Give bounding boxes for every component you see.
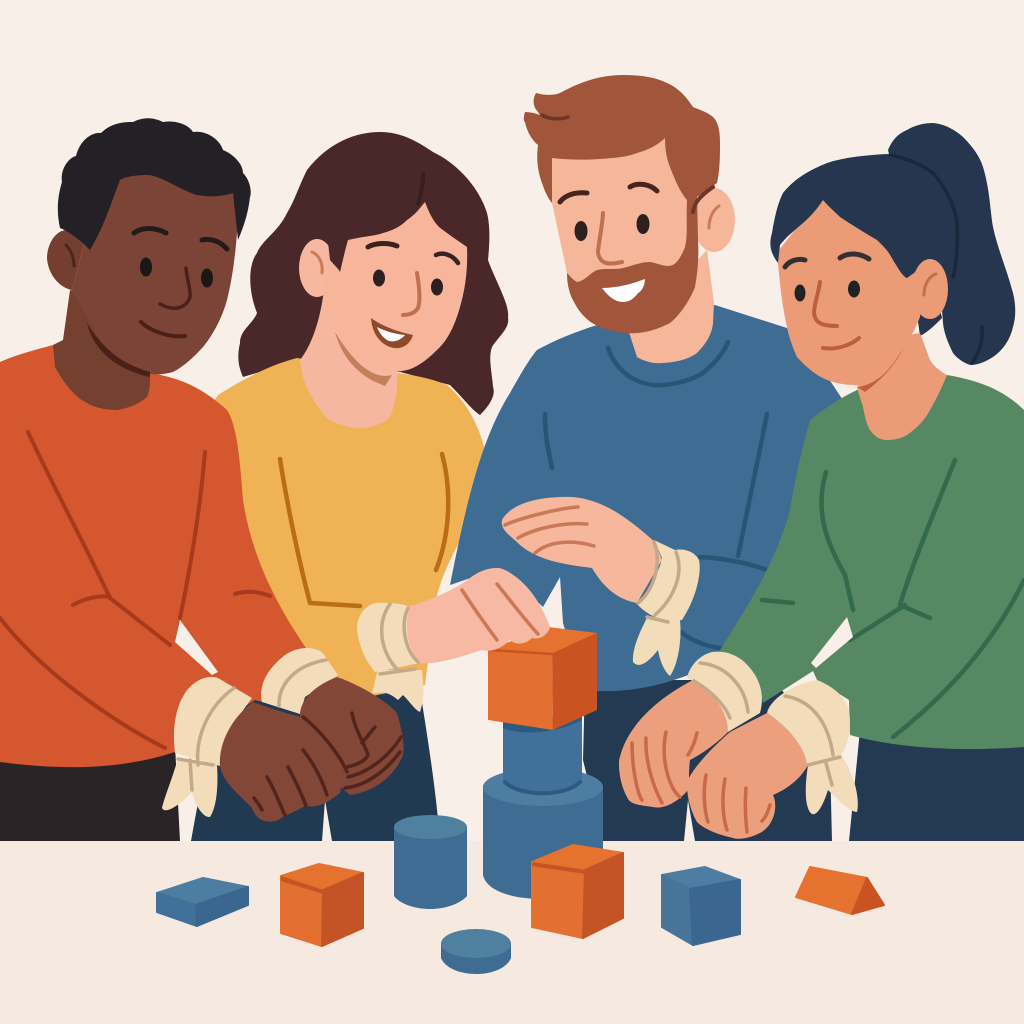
hair: [770, 154, 957, 305]
cuff tail: [806, 757, 858, 814]
ear: [912, 259, 948, 319]
smile: [371, 318, 413, 348]
sweater: [720, 375, 1024, 749]
face: [545, 125, 695, 325]
cuff: [687, 652, 762, 732]
hand: [502, 497, 662, 603]
hand: [300, 677, 404, 795]
pants: [849, 730, 1024, 841]
hand: [687, 713, 808, 839]
face: [323, 190, 467, 371]
person 3: man in blue sweater: [450, 75, 846, 841]
cuff: [767, 680, 850, 765]
table surface: [0, 841, 1024, 1024]
ear inner: [66, 245, 74, 266]
neck: [300, 297, 400, 428]
ponytail tail line: [972, 327, 982, 363]
neck shadow: [335, 332, 392, 386]
pants: [0, 745, 180, 841]
person 1: man in orange sweater: [0, 118, 306, 841]
face: [775, 195, 925, 385]
sweater folds: [762, 460, 1024, 737]
sweater folds: [280, 454, 448, 606]
person 2: woman in yellow sweater: [190, 132, 508, 841]
face: [72, 160, 238, 374]
finger lines: [462, 584, 538, 640]
beard: [567, 195, 698, 333]
gap: [811, 617, 853, 668]
ponytail band line: [890, 155, 957, 277]
ear: [299, 239, 335, 297]
ear inner: [924, 274, 936, 295]
finger lines: [505, 507, 594, 553]
ear inner: [312, 252, 322, 273]
pants: [583, 680, 832, 841]
person 3 hand and cuff: [502, 497, 700, 676]
gap between arm and body: [175, 620, 218, 675]
cuff tail: [372, 670, 423, 712]
cuff: [637, 540, 700, 620]
hand: [619, 680, 730, 808]
neck: [625, 250, 714, 363]
pants: [191, 690, 440, 841]
top orange cube: [488, 627, 597, 730]
finger lines: [345, 713, 401, 788]
large cylinder: [483, 768, 603, 899]
person 1 front hand and cuff: [162, 677, 347, 822]
person 4: woman in green sweater: [720, 123, 1024, 841]
cuff: [261, 648, 338, 714]
collar: [608, 342, 728, 385]
person 1 back hand and cuff: [261, 648, 404, 795]
middle cylinder: [503, 714, 582, 795]
person 4 right hand and cuff: [687, 680, 858, 839]
sweater: [190, 358, 487, 705]
orange cube left: [281, 864, 363, 946]
neck: [857, 333, 947, 440]
ear inner: [709, 206, 719, 228]
sweater folds: [545, 414, 767, 648]
sideburn line: [693, 187, 713, 212]
blue cube right: [662, 867, 740, 945]
cuff: [357, 603, 420, 672]
block tower: [483, 627, 603, 899]
flat blue block: [157, 878, 248, 926]
neck shadow: [857, 348, 903, 392]
blue disc: [441, 929, 511, 974]
neck: [53, 290, 150, 410]
eyes and brows: [134, 228, 227, 336]
orange cube on table: [532, 845, 623, 938]
hair behind neck: [915, 300, 942, 336]
hair: [524, 75, 720, 210]
person 4 left hand and cuff: [619, 652, 762, 808]
ear: [693, 188, 735, 252]
orange wedge: [796, 867, 884, 914]
cuff: [174, 677, 252, 766]
finger lines: [254, 717, 347, 815]
finger lines: [632, 732, 697, 803]
smile: [602, 279, 645, 302]
curly hair: [58, 118, 251, 250]
eyes and brows: [785, 254, 869, 349]
person 2 hand and cuff: [357, 568, 550, 712]
sweater folds: [0, 432, 270, 748]
sweater: [450, 305, 846, 691]
neck shadow: [87, 323, 150, 377]
cuff tail: [162, 758, 217, 817]
ear: [47, 230, 85, 290]
ponytail: [888, 123, 1015, 365]
hair part: [418, 174, 423, 204]
hand: [404, 568, 550, 663]
hair details: [542, 115, 568, 119]
hand: [220, 702, 345, 822]
cuff tail: [633, 616, 681, 676]
finger lines: [704, 775, 770, 832]
sweater: [0, 345, 306, 767]
hair fringe: [325, 150, 480, 272]
blue cylinder: [394, 815, 467, 909]
hair back: [238, 132, 508, 415]
eyes and brows: [368, 243, 458, 315]
eyes and brows: [560, 184, 657, 264]
